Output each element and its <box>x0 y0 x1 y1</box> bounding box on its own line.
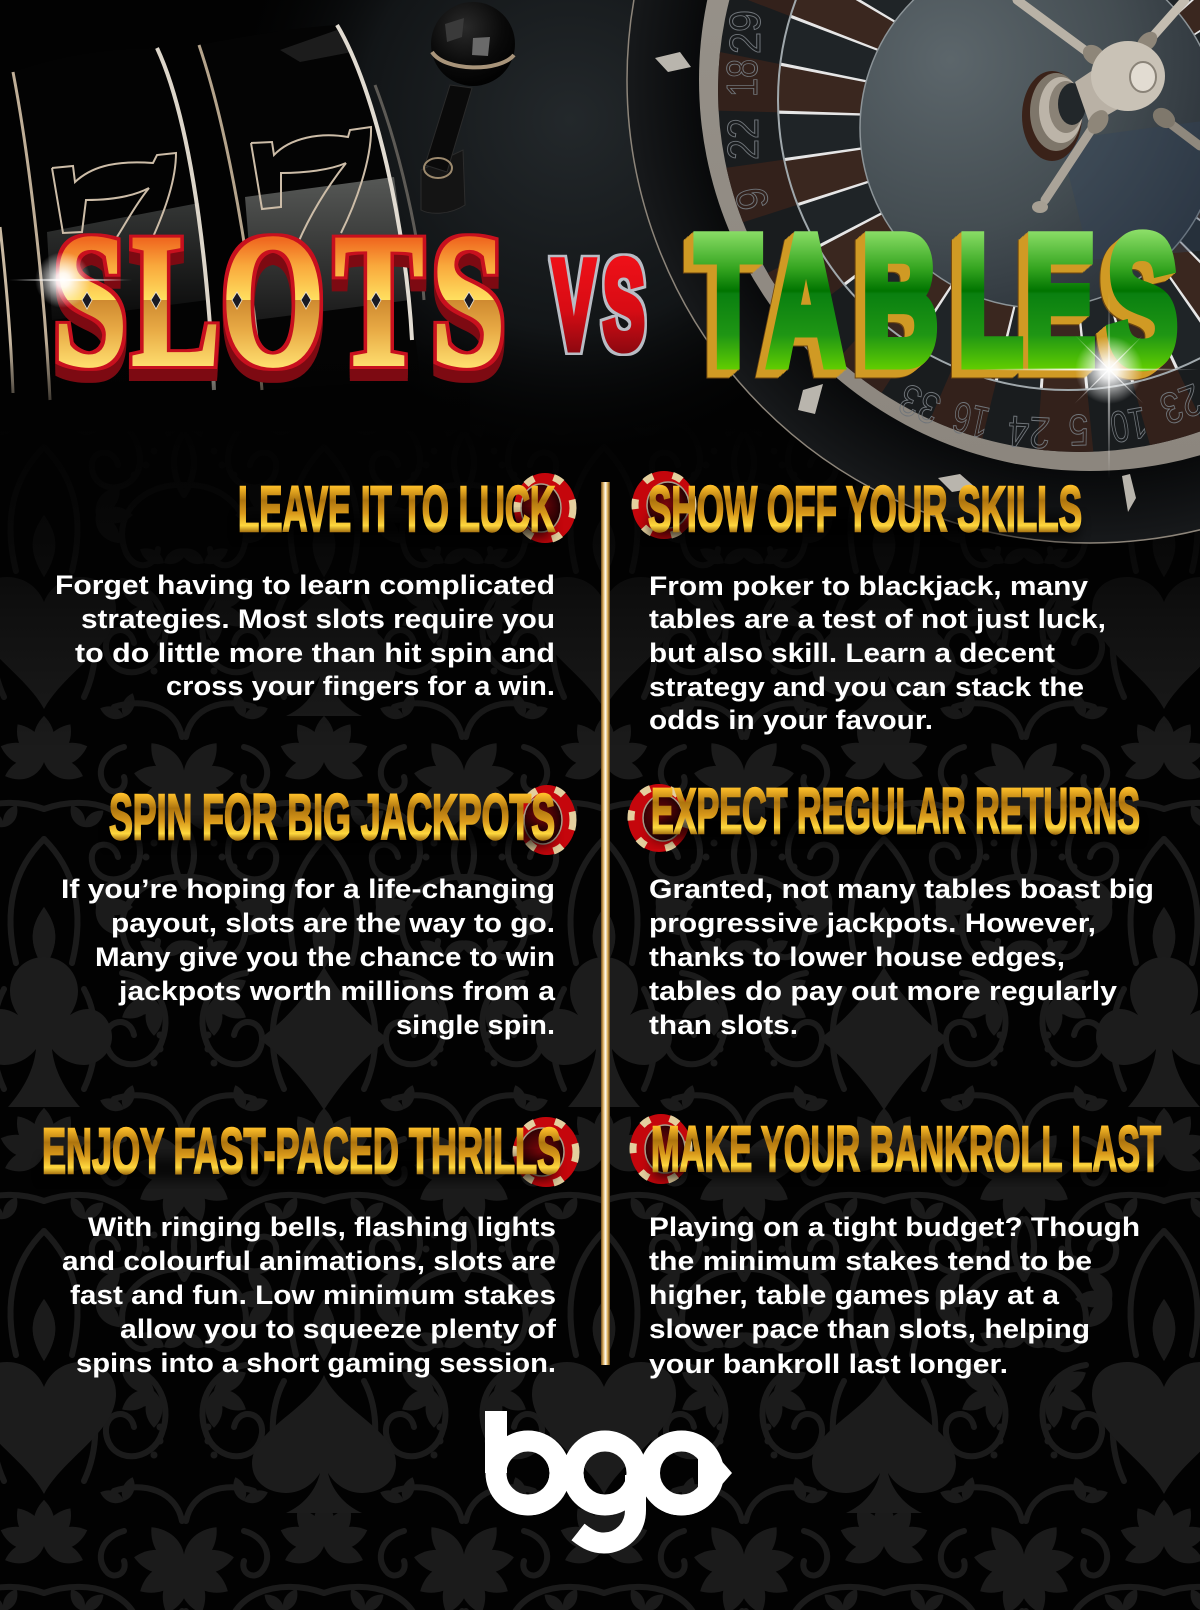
lever <box>421 2 515 213</box>
right panel: make your bankroll last <box>630 1113 1161 1379</box>
letter diamonds <box>82 292 474 309</box>
body text: slower pace than slots, helping <box>649 1314 1090 1344</box>
left panel: enjoy fast-paced thrills <box>42 1115 579 1378</box>
poker chip <box>513 1117 579 1187</box>
heading <box>42 1115 561 1187</box>
poker chip <box>518 785 576 855</box>
bgo logo: bgo <box>480 1386 725 1544</box>
poker chip <box>628 784 690 852</box>
number ring: 24 <box>1007 406 1051 457</box>
centre divider <box>601 482 610 1365</box>
body text <box>649 874 1154 1040</box>
first reel <box>13 48 214 400</box>
pocket ring with separators <box>777 0 1200 391</box>
body text: than slots. <box>649 1010 798 1040</box>
header background glow <box>0 0 1200 480</box>
number ring: 22 <box>719 118 768 160</box>
poker chip <box>632 471 696 539</box>
body text <box>61 874 556 1040</box>
left partial reel rim <box>0 227 13 393</box>
wheel turret hub <box>1017 0 1200 213</box>
body text: Granted, not many tables boast big <box>649 874 1154 904</box>
body text: From poker to blackjack, many <box>649 571 1088 601</box>
heading <box>109 781 555 853</box>
body text <box>55 570 555 701</box>
body text: tables are a test of not just luck, <box>649 604 1106 634</box>
body text: strategy and you can stack the <box>649 672 1084 702</box>
second reel <box>199 25 424 390</box>
sparkle on SLOTS <box>8 252 133 308</box>
sparkle on TABLES <box>980 290 1200 480</box>
title word: SLOTS: SLOTS <box>53 196 505 406</box>
body text <box>62 1212 557 1378</box>
right panel: show off your skills <box>632 471 1106 735</box>
body text: strategies. Most slots require you <box>81 604 555 634</box>
body text: If you’re hoping for a life-changing <box>61 874 555 904</box>
poker chip <box>514 473 576 543</box>
body text: Many give you the chance to win <box>95 942 555 972</box>
left panel: leave it to luck <box>55 473 576 701</box>
number ring: 9 <box>727 183 779 214</box>
body text: and colourful animations, slots are <box>62 1246 556 1276</box>
roulette wheel illustration <box>627 0 1200 543</box>
right panel: expect regular returns <box>628 775 1154 1040</box>
background card suits <box>0 577 1200 1513</box>
body text: progressive jackpots. However, <box>649 908 1096 938</box>
poker chip <box>630 1114 692 1184</box>
body text: to do little more than hit spin and <box>75 638 555 668</box>
body text: With ringing bells, flashing lights <box>88 1212 556 1242</box>
number ring <box>718 0 1200 457</box>
wheel outer bowl <box>627 0 1200 543</box>
heading: ENJOY FAST-PACED THRILLS <box>42 1115 561 1187</box>
left panel: spin for big jackpots <box>61 781 576 1040</box>
number ring: 18 <box>718 59 767 97</box>
body text: spins into a short gaming session. <box>76 1348 556 1378</box>
body text: Forget having to learn complicated <box>55 570 555 600</box>
number ring: 5 <box>1068 405 1089 454</box>
title word: VS: VS <box>553 235 645 375</box>
body text: but also skill. Learn a decent <box>649 638 1055 668</box>
number ring: 29 <box>721 10 770 54</box>
body text: allow you to squeeze plenty of <box>120 1314 557 1344</box>
slot machine illustration <box>0 2 515 400</box>
background damask pattern <box>0 420 1200 1610</box>
number ring: 16 <box>948 391 994 447</box>
heading: SPIN FOR BIG JACKPOTS <box>109 781 555 853</box>
body text: tables do pay out more regularly <box>649 976 1117 1006</box>
body text: the minimum stakes tend to be <box>649 1246 1092 1276</box>
heading <box>238 473 555 545</box>
wheel centre cone <box>860 0 1200 308</box>
lucky seven outlines <box>52 127 371 243</box>
body text: higher, table games play at a <box>649 1280 1060 1310</box>
number ring: 10 <box>1107 397 1150 452</box>
body text <box>649 571 1106 735</box>
bowl diamond markers <box>655 52 1136 512</box>
title word: TABLES: TABLES <box>696 198 1178 402</box>
body text: Playing on a tight budget? Though <box>649 1212 1140 1242</box>
heading: LEAVE IT TO LUCK <box>238 473 555 545</box>
body text: cross your fingers for a win. <box>166 671 555 701</box>
body text: single spin. <box>396 1010 555 1040</box>
body text: your bankroll last longer. <box>649 1349 1008 1379</box>
number ring: 33 <box>893 374 947 433</box>
body text: thanks to lower house edges, <box>649 942 1065 972</box>
body text: payout, slots are the way to go. <box>111 908 555 938</box>
wheel metal rim <box>699 0 1200 471</box>
body text: jackpots worth millions from a <box>118 976 556 1006</box>
body text <box>649 1212 1140 1379</box>
body text: fast and fun. Low minimum stakes <box>70 1280 556 1310</box>
body text: odds in your favour. <box>649 705 933 735</box>
